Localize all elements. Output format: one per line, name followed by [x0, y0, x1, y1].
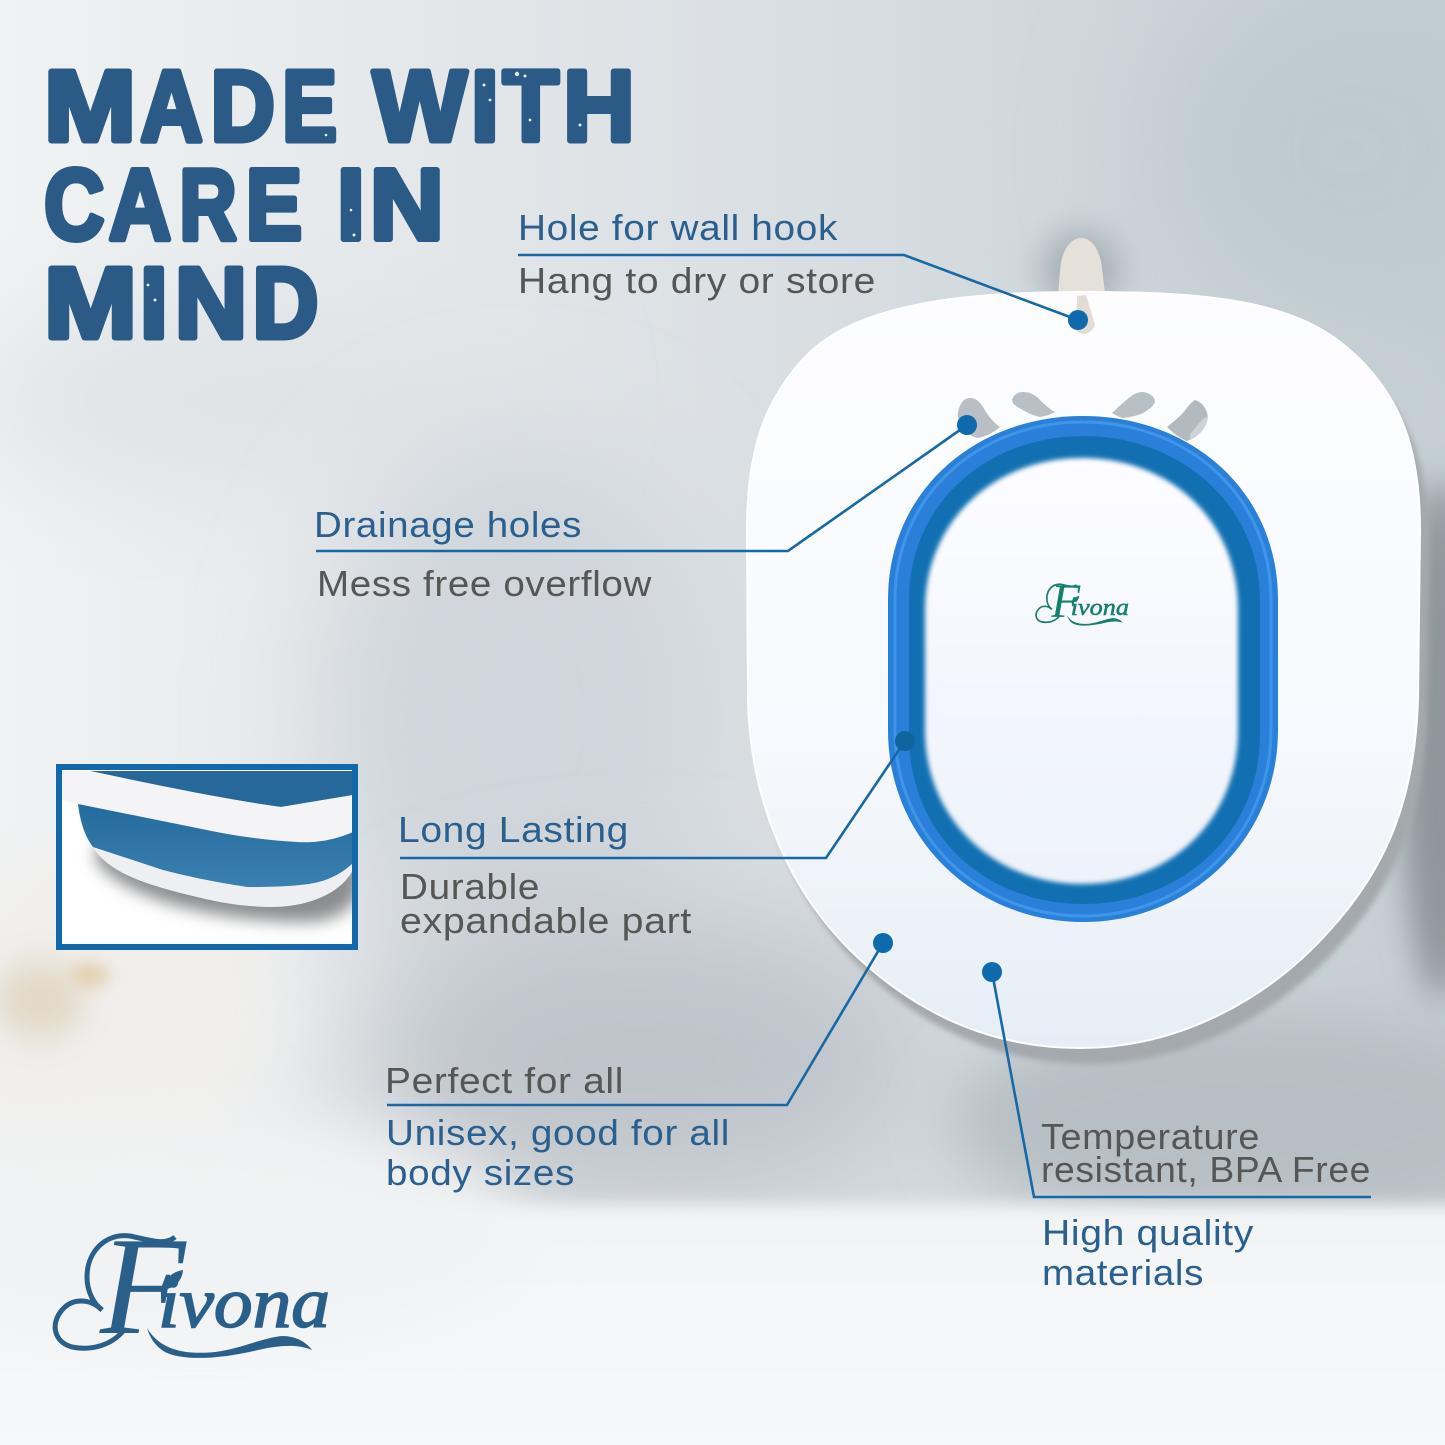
basin body: [747, 292, 1420, 1048]
callout: high quality materials: High quality: [1042, 1212, 1254, 1253]
inset: expandable part close-up: [59, 767, 360, 947]
title: R: [180, 149, 236, 261]
callout: perfect for all: Unisex, good for all: [386, 1112, 730, 1153]
hook tip over basin: [1076, 295, 1095, 334]
inner bowl: [925, 458, 1238, 884]
title: N: [370, 149, 444, 261]
callout: high quality materials: Temperature: [1041, 1116, 1260, 1157]
callout: long lasting: expandable part: [400, 900, 692, 941]
callout: drainage holes: Drainage holes: [314, 504, 582, 545]
callout: perfect for all: [385, 933, 893, 1193]
callout: long lasting: [398, 731, 915, 941]
callout: high quality materials: [982, 962, 1371, 1293]
callout: long lasting: Long Lasting: [398, 809, 629, 850]
callout: drainage holes: Mess free overflow: [317, 563, 652, 604]
small brand logo: ivona: [1071, 594, 1129, 621]
callout: hole for wall hook: Hole for wall hook: [518, 207, 838, 248]
title: I: [471, 50, 499, 162]
icon: wall hook: [1058, 238, 1105, 295]
title: C: [44, 149, 104, 261]
callout: high quality materials: materials: [1042, 1252, 1204, 1293]
title: I: [337, 149, 365, 261]
title: M: [44, 248, 137, 360]
callout: drainage holes: [314, 415, 977, 604]
title: A: [140, 50, 202, 162]
title: T: [503, 50, 559, 162]
title: I: [140, 248, 168, 360]
title: D: [253, 248, 318, 360]
title: H: [564, 50, 634, 162]
title: [44, 50, 635, 360]
callout: hole for wall hook: Hang to dry or store: [518, 260, 876, 301]
title: E: [282, 50, 337, 162]
brand logo: [55, 1209, 330, 1364]
callout: hole for wall hook: [518, 207, 1088, 330]
basin shadow: [756, 308, 1429, 1064]
callout: perfect for all: body sizes: [386, 1152, 575, 1193]
callout: long lasting: Durable: [400, 866, 540, 907]
small brand logo: F: [1050, 576, 1081, 628]
title: A: [109, 149, 171, 261]
brand logo: ivona: [158, 1263, 330, 1343]
title: E: [246, 149, 302, 261]
title: N: [175, 248, 247, 360]
product: sitz bath: [747, 238, 1429, 1064]
brand logo: F: [99, 1209, 187, 1364]
title: M: [44, 50, 136, 162]
callout: high quality materials: resistant, BPA Free: [1041, 1149, 1371, 1190]
title: D: [211, 50, 275, 162]
blue collapsible ring: [888, 416, 1278, 922]
callout: perfect for all: Perfect for all: [385, 1060, 624, 1101]
title: W: [373, 50, 467, 162]
small brand logo: [1036, 576, 1129, 628]
drainage holes: [958, 392, 1208, 441]
